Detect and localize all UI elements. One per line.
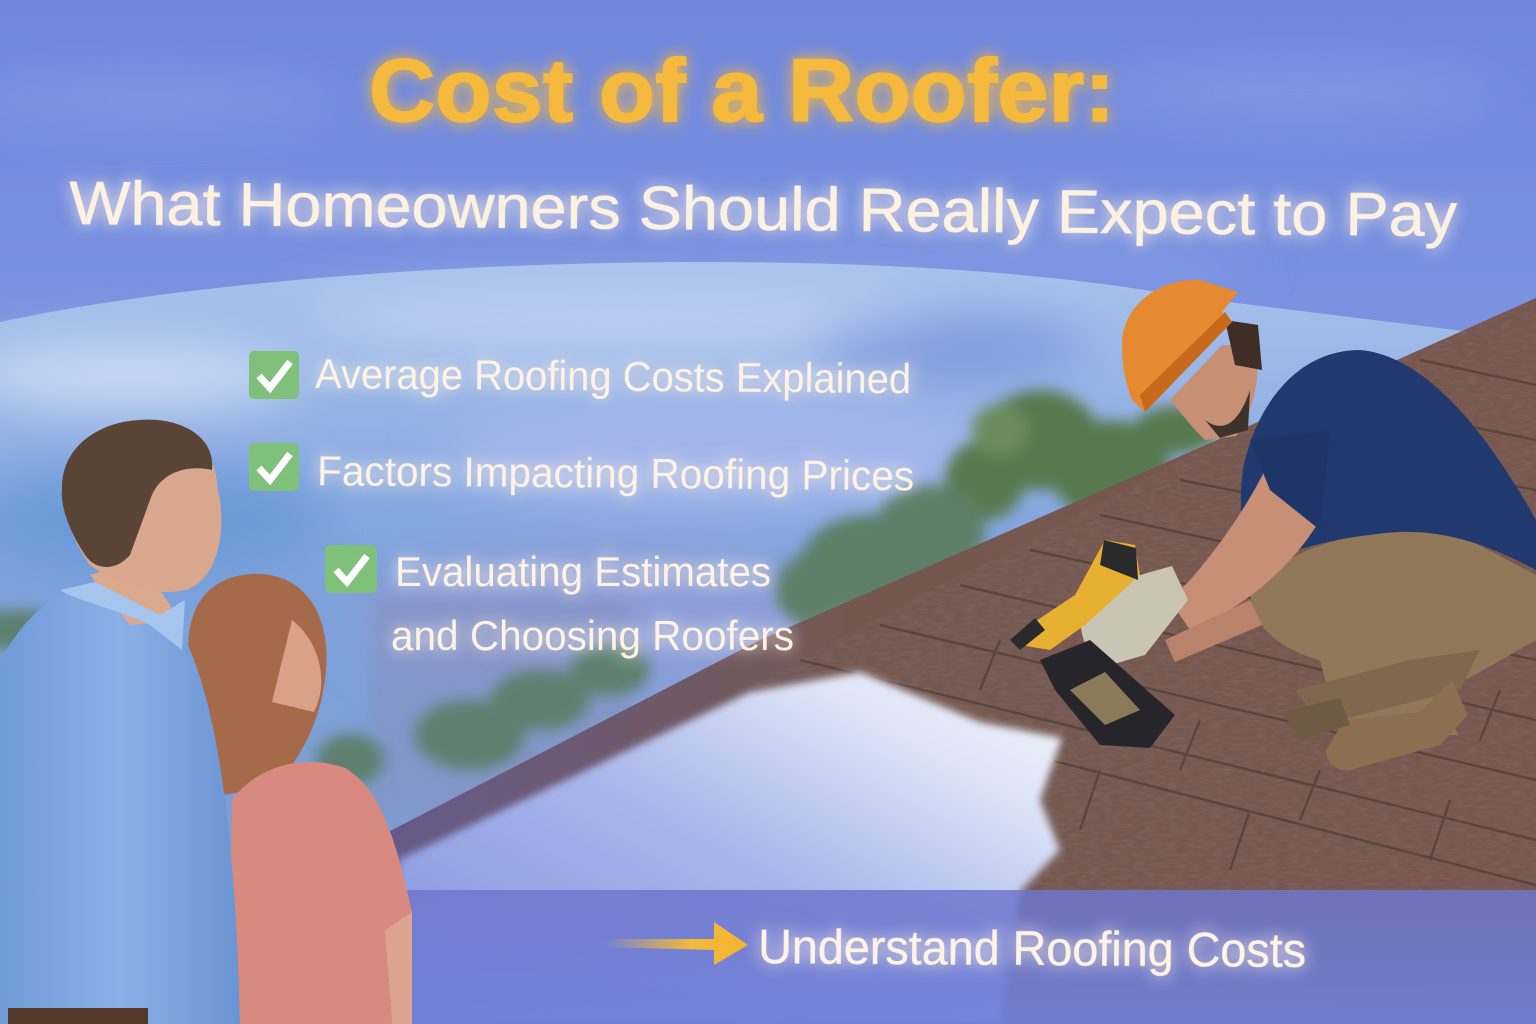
bottom band xyxy=(400,890,1536,1024)
torso xyxy=(1241,350,1536,570)
top sky clouds xyxy=(0,64,1500,281)
boots xyxy=(1326,680,1468,770)
background building xyxy=(372,595,632,815)
shingle lines xyxy=(800,360,1536,885)
title: Cost of a Roofer: xyxy=(369,40,1115,140)
lower sky panel with arc xyxy=(0,262,1536,1024)
arm xyxy=(1170,470,1320,630)
man xyxy=(0,420,240,1024)
subtitle: What Homeowners Should Really Expect to Pay xyxy=(69,169,1458,249)
icon: check mark 2 xyxy=(249,443,299,491)
item: evaluating estimates xyxy=(325,545,794,659)
call to action: Understand Roofing Costs xyxy=(758,921,1306,978)
item: evaluating estimates: Evaluating Estimates xyxy=(395,548,771,595)
nail gun xyxy=(1020,540,1140,650)
roof xyxy=(388,298,1536,1024)
hard hat xyxy=(1122,280,1238,412)
gloves xyxy=(1081,566,1188,668)
checklist xyxy=(249,350,914,659)
head xyxy=(1170,345,1258,440)
worker xyxy=(1010,280,1536,770)
item: price factors: Factors Impacting Roofing Prices xyxy=(317,447,914,499)
icon: check mark 3 xyxy=(325,545,377,593)
icon: check mark 1 xyxy=(249,351,299,399)
item: evaluating estimates: and Choosing Roofers xyxy=(391,612,794,659)
woman xyxy=(188,574,412,1024)
people xyxy=(0,420,412,1024)
background trees xyxy=(0,390,1217,786)
white painted roof coating xyxy=(398,672,1062,1024)
shingle texture xyxy=(793,302,1536,890)
item: average costs: Average Roofing Costs Explained xyxy=(315,350,911,402)
trousers xyxy=(1250,528,1536,735)
arrow xyxy=(604,922,748,965)
